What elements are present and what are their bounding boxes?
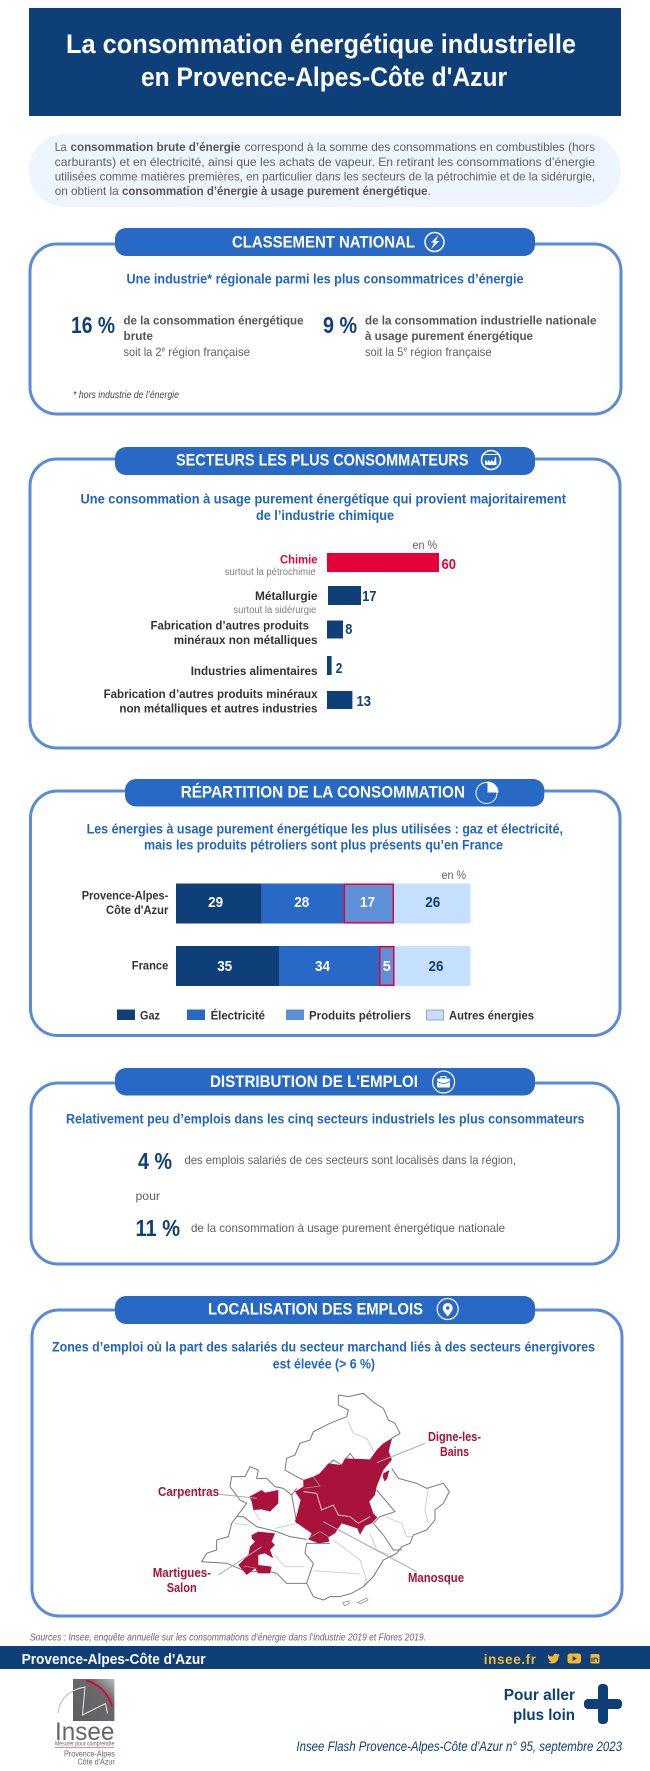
bar: Provence-Alpes-Côte d'Azur: Provence-Alpes- <box>82 888 168 902</box>
map: rivers and borders over zones <box>303 1492 370 1523</box>
bar: Chimie 60 <box>225 552 456 578</box>
icon: briefcase <box>433 1071 455 1093</box>
panel header: classement national: CLASSEMENT NATIONAL <box>232 234 415 252</box>
bar: Provence-Alpes-Côte d'Azur: 29 <box>208 895 223 911</box>
intro text block: carburants) et en électricité, ainsi que les achats de vapeur. En retirant les consommations d’énergie <box>55 155 595 169</box>
bar: Métallurgie 17 <box>233 586 376 616</box>
label: Digne-les-Bains <box>428 1430 481 1459</box>
map: red zones <box>238 1438 392 1575</box>
bar: Chimie 60: surtout la pétrochimie <box>225 567 316 578</box>
bar: Provence-Alpes-Côte d'Azur: Côte d'Azur <box>106 903 169 917</box>
key figure: 9 %: e <box>404 346 408 354</box>
icon: linkedin <box>590 1654 600 1664</box>
subheading: Une consommation à usage purement énergétique qui provient majoritairement <box>80 491 566 506</box>
bar: autres industries 13 <box>104 687 371 716</box>
footnote: * hors industrie de l’énergie <box>73 390 179 401</box>
logo: Insee: Mesurer pour comprendre <box>55 1742 115 1748</box>
bar: Provence-Alpes-Côte d'Azur: 26 <box>425 895 440 911</box>
bar: France: 34 <box>315 959 330 975</box>
subheading <box>87 821 563 852</box>
panel: distribution de l'emploi <box>31 1068 618 1264</box>
logo: Insee: Côte d'Azur <box>78 1758 115 1766</box>
logo: Insee: Insee <box>55 1718 114 1746</box>
pour aller plus loin: Pour aller <box>504 1687 575 1704</box>
subheading: de l’industrie chimique <box>256 508 394 523</box>
bar: Métallurgie 17: surtout la sidérurgie <box>233 605 317 616</box>
icon: youtube <box>568 1654 581 1664</box>
key figure: 4 %: des emplois salariés de ces secteurs sont localisés dans la région, <box>184 1153 516 1167</box>
intro text block: consommation brute d’énergie <box>70 140 241 154</box>
bar: Chimie 60: Chimie <box>280 552 318 566</box>
panel: classement national <box>30 228 621 414</box>
label: Manosque: Manosque <box>408 1571 464 1585</box>
icon: pie chart <box>476 782 498 804</box>
panel header: répartition: RÉPARTITION DE LA CONSOMMATION <box>181 782 465 802</box>
map: department and region borders <box>202 1393 449 1600</box>
leader lines <box>218 1443 425 1575</box>
intro text block: utilisées comme matières premières, en particulier dans les secteurs de la pétrochimie et de la sidérurgie, <box>55 170 595 184</box>
label: Digne-les-Bains: Bains <box>440 1445 469 1459</box>
bar: Métallurgie 17: 17 <box>362 589 376 605</box>
key figure: 9 % <box>323 312 597 359</box>
key figure: 4 % <box>138 1148 516 1174</box>
footer band: insee.fr <box>484 1652 537 1667</box>
title: La consommation énergétique industrielle <box>66 29 576 59</box>
panel: localisation des emplois <box>32 1296 622 1616</box>
key figure: 9 %: région française <box>410 345 492 359</box>
legend <box>117 1008 534 1022</box>
bar: minéraux non métalliques 8: 8 <box>345 622 352 638</box>
subheading: Les énergies à usage purement énergétique les plus utilisées : gaz et électricité, <box>87 821 563 836</box>
bar: minéraux non métalliques 8: Fabrication d’autres produits <box>150 618 309 632</box>
footer band <box>0 1646 650 1669</box>
bar: industries alimentaires 2: Industries alimentaires <box>191 664 318 678</box>
logo: Insee <box>55 1679 115 1766</box>
label: Martigues-Salon: Martigues- <box>153 1566 211 1580</box>
title <box>29 8 621 116</box>
panel header: localisation <box>115 1296 535 1324</box>
subheading <box>52 1340 595 1372</box>
bar: France: France <box>132 958 169 972</box>
key figure: 16 % <box>71 312 304 359</box>
icon: lightning bolt <box>425 232 444 252</box>
panel header: distribution: DISTRIBUTION DE L'EMPLOI <box>210 1073 418 1091</box>
icon: map pin <box>437 1298 458 1320</box>
title: en Provence-Alpes-Côte d'Azur <box>141 62 507 92</box>
icon: twitter <box>548 1654 560 1664</box>
bar chart: secteurs: en % <box>412 538 437 552</box>
map: islands <box>343 1598 368 1606</box>
bar: France: 5 <box>383 959 391 975</box>
bar: autres industries 13: non métalliques et autres industries <box>119 702 318 716</box>
subheading: Relativement peu d’emplois dans les cinq secteurs industriels les plus consommateurs <box>66 1111 584 1126</box>
key figure: 16 %: brute <box>124 329 153 343</box>
bar chart: secteurs <box>104 538 456 716</box>
map labels <box>153 1430 481 1595</box>
logo: Insee: Provence-Alpes <box>64 1750 115 1758</box>
key figure: 16 %: 16 % <box>71 312 115 338</box>
intro text block: on obtient la <box>55 184 119 198</box>
panel header: secteurs: SECTEURS LES PLUS CONSOMMATEURS <box>176 452 468 470</box>
bar: autres industries 13: Fabrication d’autres produits minéraux <box>104 687 318 701</box>
sources: Sources : Insee, enquête annuelle sur les consommations d’énergie dans l’industrie 2019 et Flores 2019. <box>30 1632 426 1644</box>
legend: Gaz <box>140 1008 160 1022</box>
intro text block <box>29 134 621 207</box>
bar: France <box>132 946 471 986</box>
bar: Chimie 60: 60 <box>442 557 456 573</box>
intro text block: . <box>428 184 431 198</box>
map: light inner borders <box>235 1422 428 1587</box>
legend: Autres énergies <box>449 1008 534 1022</box>
key figure: 11 %: 11 % <box>136 1215 180 1241</box>
label: Digne-les-Bains: Digne-les- <box>428 1430 481 1444</box>
subheading: mais les produits pétroliers sont plus présents qu’en France <box>144 838 503 852</box>
subheading: Une industrie* régionale parmi les plus consommatrices d’énergie <box>126 271 524 286</box>
panel: secteurs les plus consommateurs <box>30 447 620 748</box>
bar: minéraux non métalliques 8 <box>150 618 352 647</box>
key figure: 16 %: e <box>162 346 166 354</box>
stacked bar chart <box>82 868 470 986</box>
bar: industries alimentaires 2: 2 <box>336 661 342 677</box>
label: Martigues-Salon: Salon <box>167 1581 197 1595</box>
bar: Provence-Alpes-Côte d'Azur <box>82 884 470 924</box>
intro text block: La <box>55 140 67 154</box>
icon: plus <box>584 1684 622 1724</box>
key figure: 16 %: soit la 2 <box>124 345 162 359</box>
bar: Provence-Alpes-Côte d'Azur: 17 <box>360 895 375 911</box>
pour aller plus loin <box>504 1684 622 1724</box>
intro text block: consommation d’énergie à usage purement énergétique <box>122 184 428 198</box>
panel header: classement national <box>115 228 535 256</box>
pour aller plus loin: plus loin <box>513 1707 575 1724</box>
key figure: 11 %: de la consommation à usage purement énergétique nationale <box>191 1221 505 1235</box>
map: grey borders over zones <box>243 1477 328 1568</box>
legend: Électricité <box>211 1008 265 1022</box>
bar: minéraux non métalliques 8: minéraux non métalliques <box>174 633 318 647</box>
label: Martigues-Salon <box>153 1566 211 1595</box>
panel header: répartition <box>125 779 544 806</box>
bar: France: 26 <box>428 959 444 975</box>
bar: Métallurgie 17: Métallurgie <box>255 589 318 603</box>
panel header: localisation: LOCALISATION DES EMPLOIS <box>208 1300 423 1318</box>
key figure: 16 %: région française <box>168 345 250 359</box>
footer band: Provence-Alpes-Côte d'Azur <box>22 1651 206 1668</box>
legend: Produits pétroliers <box>309 1008 411 1022</box>
key figure: 16 %: de la consommation énergétique <box>124 314 304 328</box>
key figure: 4 %: 4 % <box>138 1148 172 1174</box>
label: Carpentras: Carpentras <box>158 1485 219 1499</box>
key figure: 9 %: soit la 5 <box>365 345 404 359</box>
map: zones d'emploi <box>202 1393 449 1606</box>
subheading: est élevée (> 6 %) <box>273 1356 375 1372</box>
key figure: 9 %: 9 % <box>323 312 357 338</box>
key figure: 9 %: à usage purement énergétique <box>365 329 533 343</box>
bar: Provence-Alpes-Côte d'Azur: 28 <box>294 895 309 911</box>
panel: répartition de la consommation <box>30 779 620 1036</box>
subheading <box>80 491 566 523</box>
intro text block: correspond à la somme des consommations en combustibles (hors <box>245 140 595 154</box>
stacked bar chart: en % <box>442 868 466 882</box>
bar: autres industries 13: 13 <box>356 694 371 710</box>
icon: factory <box>482 450 500 470</box>
bar: France: 35 <box>217 959 232 975</box>
key figure: 11 % <box>136 1215 505 1241</box>
bar: industries alimentaires 2 <box>191 656 342 678</box>
panel header: distribution <box>115 1068 535 1096</box>
panel header: secteurs <box>115 447 535 475</box>
text: pour: pour <box>136 1189 160 1203</box>
subheading: Zones d’emploi où la part des salariés du secteur marchand liés à des secteurs énergivores <box>52 1340 595 1354</box>
key figure: 9 %: de la consommation industrielle nationale <box>365 314 597 328</box>
